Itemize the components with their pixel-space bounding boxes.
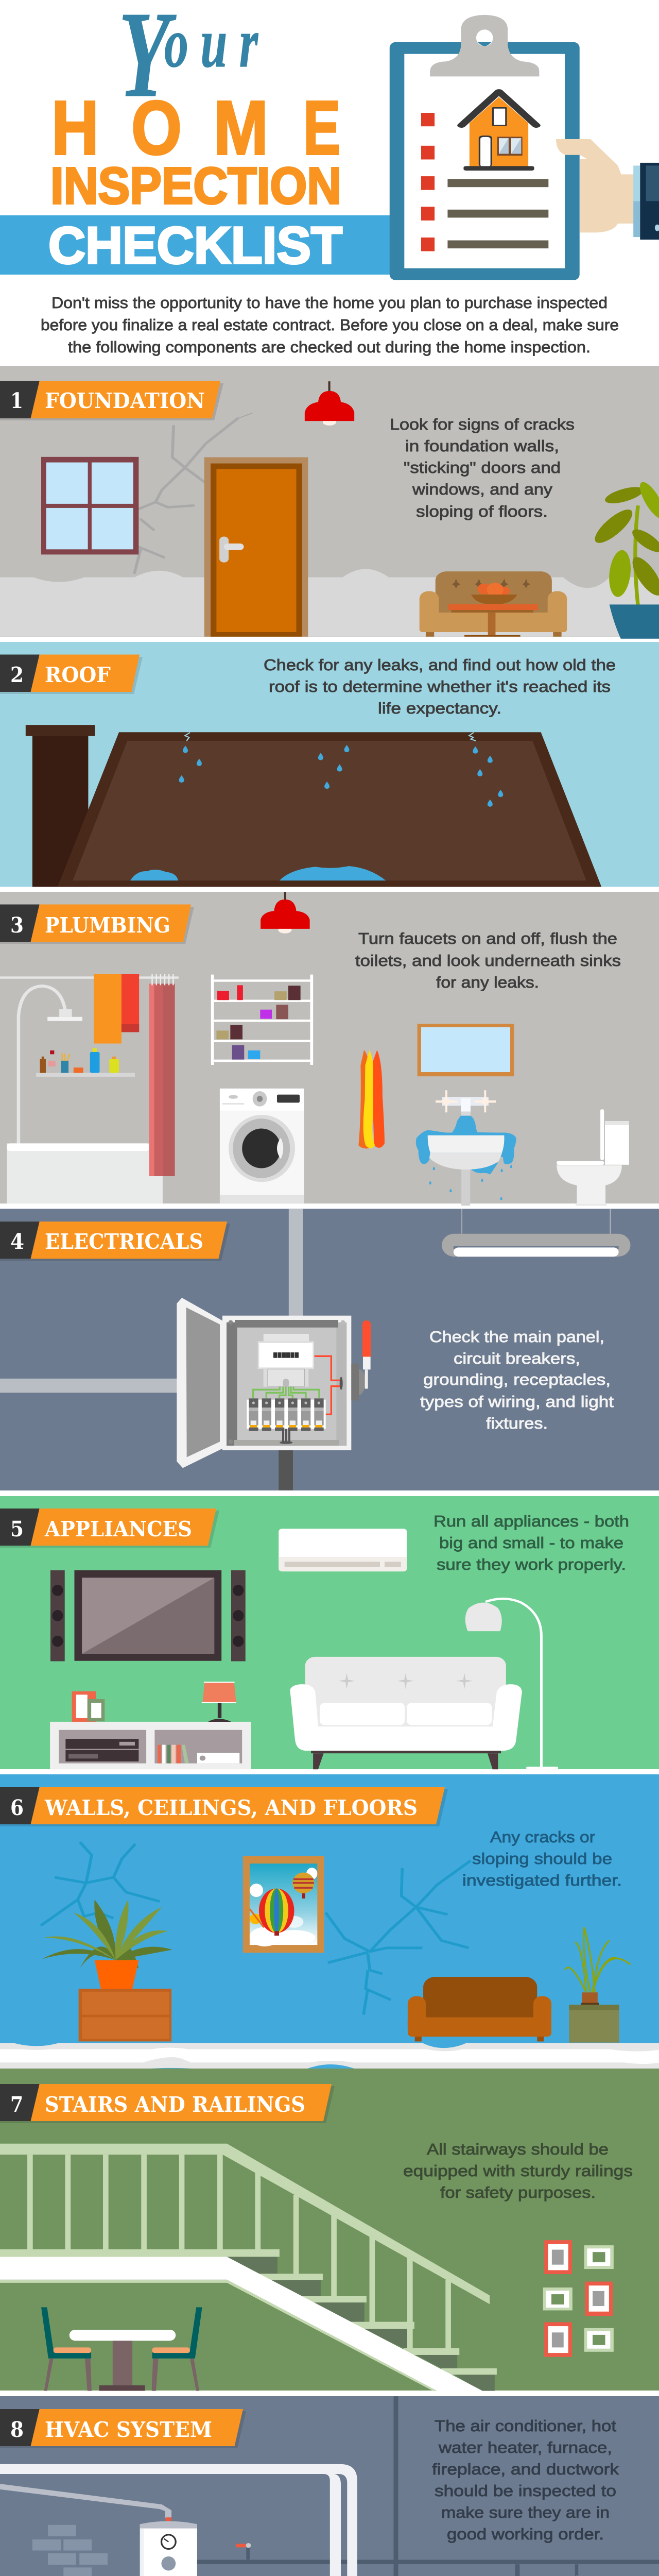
panel box bbox=[222, 1316, 351, 1450]
chimney bbox=[26, 725, 95, 887]
water drips bbox=[179, 745, 503, 807]
plant on side table bbox=[565, 1927, 630, 2043]
stair stringer bbox=[0, 2257, 482, 2391]
text: electricals: Check the main panel, bbox=[429, 1328, 604, 1346]
text: foundation: in foundation walls, bbox=[405, 437, 559, 455]
potted plant bbox=[589, 480, 659, 639]
icon: ceiling lamp bbox=[261, 892, 310, 934]
water heater bbox=[140, 2521, 197, 2576]
text: foundation: windows, and any bbox=[412, 480, 553, 498]
dining table and chairs bbox=[41, 2307, 202, 2391]
banner: 3 plumbing: PLUMBING bbox=[45, 913, 170, 938]
title word: HOME: M bbox=[214, 86, 268, 171]
wire rack bbox=[211, 975, 313, 1065]
banner: 5 appliances bbox=[0, 1509, 219, 1548]
clip bbox=[430, 15, 539, 76]
text: plumbing bbox=[355, 929, 621, 991]
media console bbox=[50, 1682, 251, 1769]
electricals illustration bbox=[0, 1209, 630, 1490]
drops bbox=[429, 1164, 512, 1200]
text: walls bbox=[462, 1828, 622, 1889]
text: electricals: circuit breakers, bbox=[454, 1349, 580, 1367]
hand holding clipboard bbox=[556, 139, 634, 232]
sofa bbox=[408, 1977, 551, 2041]
text: electricals: types of wiring, and light bbox=[420, 1393, 614, 1411]
circuit breakers bbox=[247, 1398, 326, 1444]
icon: house bbox=[461, 92, 536, 171]
banner: 8 hvac: 8 bbox=[10, 2417, 24, 2442]
title word: Your: our bbox=[164, 5, 270, 82]
text: appliances: Run all appliances - both bbox=[433, 1512, 629, 1530]
faucet bbox=[436, 1090, 496, 1116]
text: plumbing: for any leaks. bbox=[436, 973, 539, 991]
flue vent bbox=[0, 2484, 171, 2521]
overflowing water bbox=[416, 1116, 516, 1175]
panel: 4 electricals bbox=[0, 1209, 659, 1490]
banner: 7 stairs: STAIRS AND RAILINGS bbox=[45, 2092, 305, 2117]
panel door bbox=[177, 1298, 222, 1468]
text: roof: life expectancy. bbox=[378, 699, 501, 717]
text: plumbing: Turn faucets on and off, flush the bbox=[358, 929, 617, 947]
banner: 1 foundation: 1 bbox=[10, 388, 23, 413]
panel: 8 hvac system bbox=[0, 2396, 659, 2576]
banner: 7 stairs bbox=[0, 2084, 335, 2123]
foundation illustration bbox=[0, 381, 659, 639]
conduits bbox=[0, 1209, 303, 1490]
banner: 4 electricals: ELECTRICALS bbox=[45, 1229, 203, 1254]
text: hvac: water heater, furnace, bbox=[438, 2438, 612, 2456]
text: stairs: All stairways should be bbox=[427, 2140, 609, 2158]
shower bbox=[19, 986, 82, 1145]
title word: HOME: H bbox=[51, 86, 99, 171]
title bbox=[48, 0, 342, 275]
floor bbox=[0, 569, 659, 637]
plumbing illustration bbox=[0, 892, 514, 1204]
text: electricals bbox=[420, 1328, 614, 1432]
intro text bbox=[41, 294, 619, 356]
air conditioner bbox=[279, 1529, 407, 1571]
text: roof: roof is to determine whether it's reached its bbox=[269, 677, 611, 696]
text: roof: Check for any leaks, and find out how old the bbox=[264, 656, 616, 674]
title word: INSPECTION: INSPECTION bbox=[50, 157, 341, 215]
leaking sink and toilet bbox=[416, 1090, 629, 1206]
floor edge torn band bbox=[0, 2043, 659, 2069]
banner: 6 walls: WALLS, CEILINGS, AND FLOORS bbox=[44, 1795, 418, 1820]
panel: 2 roof bbox=[0, 642, 659, 887]
banner: 3 plumbing: 3 bbox=[10, 913, 24, 938]
mirror bbox=[418, 1024, 514, 1076]
washing machine bbox=[220, 1089, 304, 1204]
blue title band bbox=[0, 215, 391, 275]
text: hvac: make sure they are in bbox=[441, 2503, 610, 2521]
banner: 5 appliances: APPLIANCES bbox=[44, 1517, 192, 1541]
stairs illustration bbox=[0, 2144, 614, 2391]
appliances illustration bbox=[50, 1529, 558, 1769]
panel: 3 plumbing bbox=[0, 892, 659, 1206]
text: hvac: good working order. bbox=[447, 2525, 604, 2543]
exposed bricks bbox=[32, 2525, 108, 2576]
hanging towel bbox=[358, 1050, 385, 1148]
wall crack bbox=[134, 413, 252, 573]
text: appliances: big and small - to make bbox=[439, 1534, 623, 1552]
intro text: the following components are checked out during the home inspection. bbox=[68, 338, 591, 356]
text: plumbing: toilets, and look underneath sinks bbox=[355, 952, 621, 970]
bathroom shelf bbox=[36, 1048, 135, 1077]
checklist boxes bbox=[421, 113, 435, 251]
stair risers bbox=[227, 2257, 495, 2391]
intro text: Don't miss the opportunity to have the home you plan to purchase inspected bbox=[51, 294, 608, 312]
text: hvac bbox=[432, 2417, 619, 2543]
disconnect handle bbox=[351, 1320, 371, 1400]
sleeve and cuff bbox=[633, 163, 659, 240]
title word: HOME: E bbox=[303, 86, 340, 171]
banner: 2 roof bbox=[0, 654, 143, 694]
text: stairs: equipped with sturdy railings bbox=[403, 2162, 633, 2180]
window bbox=[41, 457, 138, 554]
banner: 2 roof: ROOF bbox=[45, 663, 111, 687]
text: walls: sloping should be bbox=[472, 1850, 612, 1868]
text: foundation: "sticking" doors and bbox=[404, 459, 561, 477]
text: appliances: sure they work properly. bbox=[437, 1555, 626, 1573]
banner: 7 stairs: 7 bbox=[10, 2092, 23, 2117]
pipes bbox=[197, 2396, 659, 2576]
text: foundation: sloping of floors. bbox=[416, 502, 548, 520]
television bbox=[74, 1570, 221, 1661]
title word: HOME: O bbox=[131, 86, 182, 171]
floor lamp bbox=[465, 1599, 558, 1769]
banner: 2 roof: 2 bbox=[10, 663, 24, 687]
white ducts bbox=[0, 2464, 357, 2576]
text: foundation: Look for signs of cracks bbox=[390, 415, 575, 433]
text: hvac: The air conditioner, hot bbox=[435, 2417, 616, 2435]
banner: 6 walls bbox=[0, 1787, 448, 1826]
checklist lines bbox=[447, 179, 548, 248]
banner: 4 electricals: 4 bbox=[10, 1229, 24, 1254]
banner: 4 electricals bbox=[0, 1222, 230, 1261]
wires bbox=[253, 1387, 319, 1398]
text: roof bbox=[264, 656, 616, 717]
panel: 1 foundation bbox=[0, 366, 659, 639]
balloon picture bbox=[243, 1856, 324, 1953]
walls illustration bbox=[41, 1842, 630, 2043]
shower rod bbox=[0, 976, 179, 979]
puddles bbox=[130, 866, 386, 880]
sofa and table bbox=[420, 571, 567, 637]
text: hvac: fireplace, and ductwork bbox=[432, 2460, 619, 2478]
sink basin bbox=[428, 1136, 504, 1206]
text: walls: investigated further. bbox=[462, 1871, 622, 1889]
text: appliances bbox=[433, 1512, 629, 1573]
door bbox=[204, 457, 308, 637]
banner: 6 walls: 6 bbox=[10, 1795, 24, 1820]
roof cracks bbox=[185, 733, 476, 741]
text: stairs: for safety purposes. bbox=[440, 2183, 596, 2201]
wall picture frames bbox=[543, 2240, 614, 2357]
valves and gauge bbox=[236, 2543, 588, 2576]
text: hvac: should be inspected to bbox=[435, 2482, 616, 2500]
banner: 8 hvac: HVAC SYSTEM bbox=[45, 2417, 212, 2442]
toilet bbox=[557, 1109, 629, 1206]
hvac illustration bbox=[0, 2396, 659, 2576]
meter bbox=[258, 1334, 314, 1387]
clipboard board bbox=[390, 42, 580, 280]
text: stairs bbox=[403, 2140, 633, 2201]
potted palm on cabinet bbox=[42, 1900, 172, 2041]
banner: 3 plumbing bbox=[0, 905, 194, 944]
panel: 6 walls, ceilings, and floors bbox=[0, 1774, 659, 2069]
intro text: before you finalize a real estate contract. Before you close on a deal, make sure bbox=[41, 316, 619, 334]
shower curtain bbox=[149, 974, 175, 1176]
icon: ceiling lamp bbox=[305, 381, 354, 426]
breaker panel bbox=[177, 1298, 371, 1468]
title word: CHECKLIST: CHECKLIST bbox=[48, 217, 342, 275]
bathtub bbox=[7, 1143, 163, 1204]
speakers bbox=[50, 1570, 246, 1661]
towels bbox=[94, 974, 139, 1044]
banner: 5 appliances: 5 bbox=[10, 1517, 24, 1541]
panel: 5 appliances bbox=[0, 1496, 659, 1769]
text: walls: Any cracks or bbox=[490, 1828, 595, 1846]
railing bbox=[0, 2144, 497, 2375]
clipboard illustration bbox=[390, 15, 659, 280]
sofa bbox=[290, 1657, 522, 1769]
banner: 1 foundation: FOUNDATION bbox=[45, 388, 205, 413]
panel: 7 stairs and railings bbox=[0, 2069, 659, 2391]
wall cracks bbox=[41, 1842, 471, 2015]
header: title and clipboard bbox=[0, 0, 659, 356]
text: electricals: grounding, receptacles, bbox=[423, 1370, 611, 1388]
text: electricals: fixtures. bbox=[486, 1414, 548, 1432]
banner: 8 hvac bbox=[0, 2409, 246, 2448]
text: foundation bbox=[390, 415, 575, 520]
roof bbox=[58, 732, 601, 887]
ceiling light bbox=[442, 1209, 630, 1257]
roof illustration bbox=[26, 725, 601, 887]
banner: 1 foundation bbox=[0, 381, 223, 420]
